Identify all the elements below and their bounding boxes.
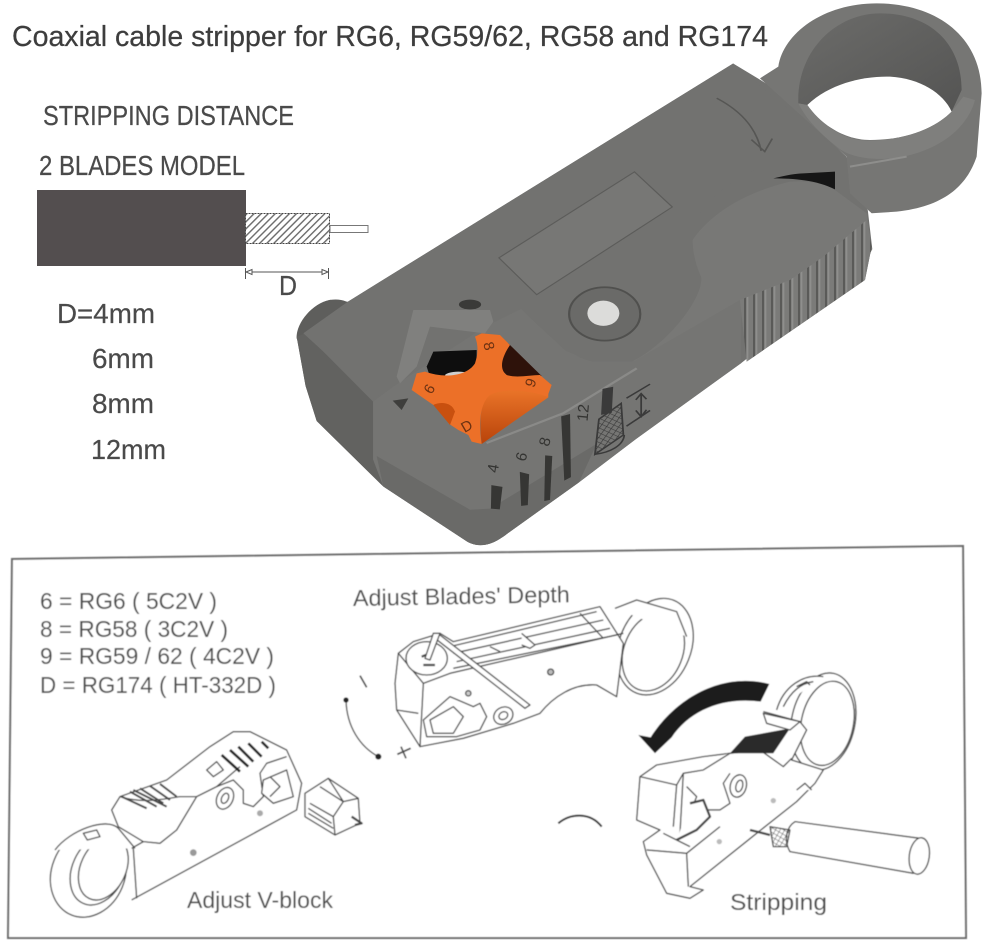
list of stripping distances: 6mm (92, 343, 154, 374)
latch (397, 310, 493, 383)
front face (373, 298, 741, 545)
insert wells (427, 343, 548, 444)
illustration: stripping tool (558, 667, 932, 898)
cable (750, 822, 932, 876)
cable type legend: 6 = RG6 ( 5C2V ) (40, 588, 217, 614)
scale ticks (491, 414, 571, 509)
hatched grip (730, 728, 790, 753)
cable jacket (37, 190, 246, 266)
latch and scale markings (393, 310, 593, 474)
title: Coaxial cable stripper for RG6, RG59/62, RG58 and RG174 (12, 21, 768, 53)
cable type legend: 8 = RG58 ( 3C2V ) (40, 616, 228, 642)
label: adjust blades depth: Adjust Blades' Depth (353, 581, 570, 611)
heading: stripping distance: STRIPPING DISTANCE (43, 100, 294, 131)
list of stripping distances: 12mm (91, 434, 166, 465)
tool ring (777, 667, 865, 776)
slot (773, 172, 835, 189)
list of stripping distances: D=4mm (57, 298, 155, 329)
tool body (637, 712, 823, 898)
scale numerals (485, 403, 593, 474)
insert numerals: D (459, 417, 476, 436)
scale numerals: 8 (536, 435, 555, 448)
top face (303, 63, 847, 398)
knob (297, 299, 352, 351)
cable type legend (40, 588, 276, 698)
thumb wheel (633, 172, 872, 362)
direction arrow (717, 98, 772, 152)
arrow: rotation direction (638, 681, 769, 753)
icon: rotation arc with plus and minus (343, 676, 411, 760)
orange cross (412, 333, 552, 444)
insert numerals (421, 340, 541, 436)
front edge highlight (486, 368, 637, 443)
insert numerals: 6 (421, 382, 439, 397)
scale numerals: 12 (575, 403, 593, 422)
tool silhouette underlay (297, 63, 872, 545)
photo: coaxial cable stripper tool (297, 3, 982, 545)
finger ring (760, 3, 982, 213)
list of stripping distances (57, 298, 166, 465)
insert numerals: 9 (523, 376, 541, 390)
cable type legend: D = RG174 ( HT-332D ) (40, 672, 276, 698)
insert numerals: 8 (479, 340, 497, 352)
illustration: adjust blades tool (395, 587, 707, 747)
pivot bolt (569, 287, 640, 341)
scale numerals: 4 (485, 462, 503, 474)
pointer triangle (393, 398, 408, 410)
label: stripping: Stripping (730, 889, 827, 915)
braid section (246, 214, 330, 244)
dimension label D: D (279, 270, 297, 301)
panel border (8, 546, 966, 938)
centre conductor (330, 226, 368, 232)
dimension D arrow (246, 268, 328, 279)
orange insert (412, 333, 552, 444)
heading: 2 blades model: 2 BLADES MODEL (39, 150, 245, 181)
label recess (499, 172, 672, 295)
cable symbol (595, 384, 650, 454)
cable diagram (37, 190, 368, 301)
lower band (377, 444, 597, 545)
label: adjust v-block: Adjust V-block (187, 887, 333, 913)
small arc mark (558, 816, 602, 827)
illustration: adjust v-block tool (37, 732, 362, 929)
scale numerals: 6 (513, 450, 531, 463)
panel: instructions (8, 546, 966, 938)
small pin (459, 300, 481, 309)
left side face (297, 333, 383, 487)
list of stripping distances: 8mm (92, 388, 154, 419)
cable type legend: 9 = RG59 / 62 ( 4C2V ) (40, 643, 274, 669)
